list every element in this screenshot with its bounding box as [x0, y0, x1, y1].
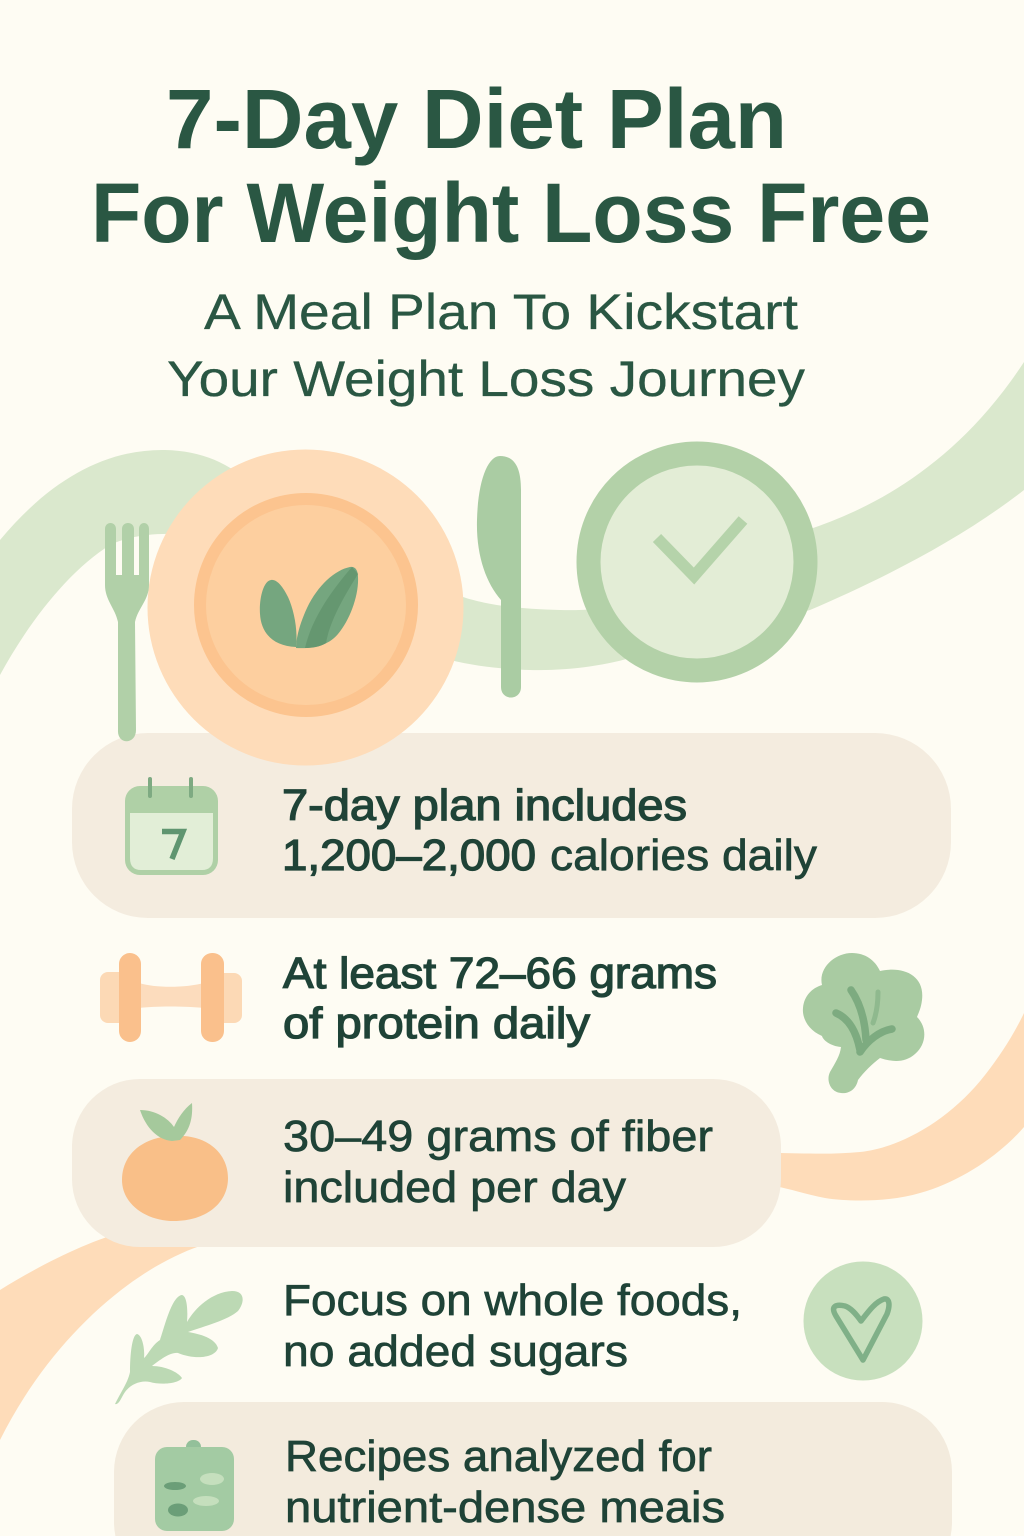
text: recipes: nutrient-dense meais	[285, 1483, 725, 1532]
orange ribbon left	[0, 1230, 200, 1440]
icon: broccoli	[803, 953, 924, 1093]
icon: clipboard	[155, 1440, 234, 1531]
icon: heart badge	[804, 1262, 922, 1380]
icon: plate	[148, 450, 464, 766]
icon: orange	[122, 1103, 228, 1221]
icon: fork	[105, 523, 149, 741]
icon: check mark	[657, 520, 743, 576]
subtitle: A Meal Plan To Kickstart	[204, 284, 798, 340]
subtitle: Your Weight Loss Journey	[167, 351, 805, 407]
subtitle	[167, 284, 805, 407]
panel: fiber pill	[72, 1079, 781, 1247]
panel: recipes pill	[114, 1402, 952, 1536]
text: calories: 7-day plan includes	[282, 781, 687, 830]
icon: knife	[477, 456, 521, 698]
icon: leaves on plate	[260, 567, 358, 648]
text: protein: At least 72–66 grams	[283, 949, 717, 998]
title	[91, 72, 931, 260]
title: 7-Day Diet Plan	[166, 72, 787, 166]
text: protein: of protein daily	[283, 999, 590, 1048]
text: fiber	[283, 1112, 713, 1212]
icon: dumbbell	[100, 953, 242, 1042]
icon: herb sprig	[115, 1291, 243, 1404]
text: calories: 1,200–2,000	[282, 831, 536, 880]
icon: calendar	[125, 777, 218, 875]
text: fiber: included per day	[283, 1163, 626, 1212]
text: fiber: 30–49 grams of fiber	[283, 1112, 713, 1161]
icon: clock with check mark	[588, 454, 806, 670]
text: calories	[282, 781, 817, 880]
text: whole foods	[283, 1276, 742, 1376]
text: recipes: Recipes analyzed for	[285, 1432, 712, 1481]
orange ribbon right	[775, 1013, 1024, 1201]
text: protein	[283, 949, 717, 1048]
text: whole foods: Focus on whole foods,	[283, 1276, 742, 1325]
title: For Weight Loss Free	[91, 166, 931, 260]
panel: calories pill	[72, 733, 951, 918]
text: whole foods: no added sugars	[283, 1327, 628, 1376]
text: recipes	[285, 1432, 725, 1532]
green ribbon background	[0, 362, 1024, 675]
text: calories: calories daily	[550, 831, 817, 880]
